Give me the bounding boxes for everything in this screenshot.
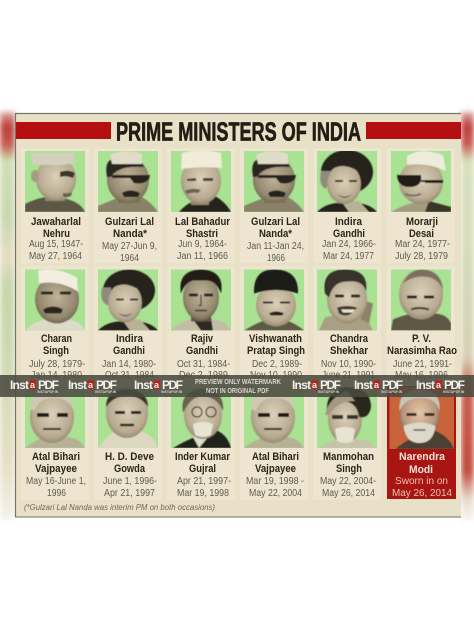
portrait: Vajpayee <box>25 387 85 448</box>
name: Narendra <box>399 451 446 463</box>
dates <box>247 241 304 264</box>
name <box>399 451 446 476</box>
dates <box>29 359 85 381</box>
name: Gulzari Lal <box>105 216 154 228</box>
dates: May 22, 2004 <box>249 488 302 499</box>
dates: 1996 <box>47 488 66 499</box>
name <box>330 333 369 357</box>
dates <box>392 476 452 499</box>
dates <box>102 359 156 381</box>
portrait: Modi <box>390 387 454 449</box>
card: Charan Singh <box>25 270 85 379</box>
dates: Mar 24, 1977 <box>323 251 374 262</box>
card: Atal Bihari Vajpayee <box>25 392 86 496</box>
name: Pratap Singh <box>247 345 305 357</box>
name <box>105 216 154 240</box>
dates: Apr 21, 1997- <box>177 476 231 487</box>
watermark logo 6: a <box>436 380 442 390</box>
dates: Oct 31, 1984- <box>177 359 230 370</box>
heading: title with red bars: PRIME MINISTERS OF INDIA <box>116 116 361 146</box>
name: Nanda* <box>259 228 293 240</box>
name: Manmohan <box>323 451 374 463</box>
watermark logo 2: INSTAPDF.IN <box>95 390 117 394</box>
portrait: V. P. Singh <box>244 270 304 330</box>
card: Narendra Modi (highlighted) <box>387 386 456 499</box>
dates: May 26, 2014 <box>322 488 375 499</box>
portrait: Shastri <box>171 150 231 212</box>
dates: May 16, 1996 <box>395 370 448 381</box>
name: Modi <box>409 464 433 476</box>
watermark logo 6: PDF <box>444 378 465 392</box>
watermark logo 6: INSTAPDF.IN <box>443 390 465 394</box>
name: Lal Bahadur <box>175 216 231 228</box>
name <box>175 451 231 475</box>
dates: Nov 10, 1990 <box>250 370 302 381</box>
name: Singh <box>336 463 362 475</box>
name: Vajpayee <box>255 463 296 475</box>
dates <box>26 476 86 499</box>
dates: May 16-June 1, <box>26 476 86 487</box>
dates: Sworn in on <box>395 476 448 487</box>
name: Singh <box>43 345 69 357</box>
watermark logo 6 <box>416 378 465 394</box>
name: Jawaharlal <box>31 216 81 228</box>
watermark notice: PREVIEW ONLY WATERMARK <box>195 379 281 386</box>
card: Inder Kumar Gujral <box>171 388 231 498</box>
dates <box>102 241 157 264</box>
watermark notice <box>195 379 281 395</box>
portrait: Nehru <box>25 151 85 212</box>
name: Nanda* <box>113 228 148 240</box>
dates <box>246 476 304 499</box>
dates: July 28, 1979 <box>395 251 448 262</box>
watermark logo 2: Inst <box>68 378 87 392</box>
dates: Jan 14, 1980 <box>31 370 82 381</box>
card: Vishwanath Pratap Singh <box>244 270 304 379</box>
dates: Oct 31, 1984 <box>105 370 154 381</box>
name <box>41 333 72 357</box>
card: Chandra Shekhar <box>317 270 377 379</box>
name <box>387 333 457 357</box>
portrait: Indira Gandhi <box>98 270 158 330</box>
watermark logo 3: INSTAPDF.IN <box>161 390 183 394</box>
card: Indira Gandhi <box>317 151 377 260</box>
name: Atal Bihari <box>252 451 299 463</box>
name: Narasimha Rao <box>387 345 457 357</box>
portrait: Nanda <box>244 151 304 212</box>
dates: 1964 <box>120 253 139 264</box>
name <box>247 333 305 357</box>
portrait: Morarji Desai <box>391 151 451 212</box>
card: Manmohan Singh <box>317 387 377 498</box>
name: Nehru <box>43 228 70 240</box>
watermark logo 3 <box>134 378 183 394</box>
watermark logo 1: INSTAPDF.IN <box>37 390 59 394</box>
dates: July 28, 1979- <box>29 359 85 370</box>
dates <box>250 359 302 381</box>
dates: May 27, 1964 <box>29 251 82 262</box>
watermark logo 1: a <box>30 380 36 390</box>
name: Chandra <box>330 333 369 345</box>
watermark band <box>0 375 474 397</box>
dates: Jan 11, 1966 <box>177 251 228 262</box>
card: Atal Bihari Vajpayee (second term) <box>244 392 304 498</box>
dates: Jan 14, 1980- <box>102 359 156 370</box>
watermark logo 5 <box>354 378 403 394</box>
dates: 1966 <box>267 253 285 264</box>
name: Inder Kumar <box>175 451 231 463</box>
portrait: Indira Gandhi <box>317 150 377 212</box>
card: P. V. Narasimha Rao <box>387 266 457 382</box>
card: Jawaharlal Nehru <box>25 151 85 261</box>
portrait: Vajpayee <box>244 387 304 448</box>
dates <box>177 359 230 381</box>
name: Shekhar <box>330 345 369 357</box>
portrait: Deve Gowda <box>98 387 158 448</box>
dates: May 26, 2014 <box>392 488 452 499</box>
dates: Dec 2, 1989 <box>179 370 228 381</box>
name: Gandhi <box>113 345 145 357</box>
dates: Mar 24, 1977- <box>395 239 450 250</box>
dates <box>177 476 231 499</box>
card: Lal Bahadur Shastri <box>171 151 231 260</box>
dates: June 1, 1996- <box>103 476 157 487</box>
portrait: Chandra Shekhar <box>317 270 377 330</box>
dates <box>103 476 157 499</box>
watermark logo 2: a <box>88 380 94 390</box>
dates: Mar 19, 1998 - <box>246 476 304 487</box>
watermark logo 1: PDF <box>38 378 59 392</box>
watermark logo 3: Inst <box>134 378 153 392</box>
dates <box>29 239 83 262</box>
dates: May 22, 2004- <box>320 476 376 487</box>
name: Gulzari Lal <box>251 216 300 228</box>
name <box>32 451 80 475</box>
footnote: (*Gulzari Lal Nanda was interim PM on both occasions) <box>24 503 215 512</box>
card: Rajiv Gandhi <box>171 270 231 379</box>
portrait: Gujral <box>171 387 231 448</box>
card: Gulzari Lal Nanda (second term) <box>244 151 304 261</box>
dates <box>321 359 376 381</box>
name: Gandhi <box>186 345 218 357</box>
name: Atal Bihari <box>32 451 80 463</box>
watermark logo 6: Inst <box>416 378 435 392</box>
watermark logo 1 <box>10 378 59 394</box>
portrait: Narasimha Rao <box>391 270 451 330</box>
watermark logo 5: PDF <box>382 378 403 392</box>
name <box>333 216 365 240</box>
watermark logo 4: Inst <box>292 378 311 392</box>
name: Gowda <box>114 463 146 475</box>
dates: Mar 19, 1998 <box>177 488 229 499</box>
name: Indira <box>335 216 363 228</box>
watermark logo 2 <box>68 378 117 394</box>
watermark logo 5: a <box>374 380 380 390</box>
dates: Aug 15, 1947- <box>29 239 83 250</box>
name: P. V. <box>412 333 431 345</box>
watermark logo 4: PDF <box>320 378 341 392</box>
dates: Nov 10, 1990- <box>321 359 376 370</box>
dates: Apr 21, 1997 <box>104 488 155 499</box>
name <box>175 216 231 240</box>
dates <box>395 239 450 262</box>
name: Desai <box>409 228 434 240</box>
name: Vishwanath <box>249 333 302 345</box>
name: Gujral <box>189 463 216 475</box>
dates <box>177 239 228 262</box>
card: Indira Gandhi (second term) <box>98 270 158 379</box>
dates: Dec 2, 1989- <box>252 359 302 370</box>
watermark logo 5: INSTAPDF.IN <box>381 390 403 394</box>
dates <box>322 239 376 262</box>
watermark logo 4: INSTAPDF.IN <box>318 390 340 394</box>
card: Morarji Desai <box>391 151 451 261</box>
name: Indira <box>116 333 144 345</box>
name <box>186 333 218 357</box>
panel: poster background <box>15 113 461 517</box>
name: Charan <box>41 333 72 345</box>
name <box>252 451 299 475</box>
dates: Jun 9, 1964- <box>178 239 227 250</box>
name <box>406 216 438 240</box>
name: Vajpayee <box>35 463 77 475</box>
dates: May 27-Jun 9, <box>102 241 157 252</box>
dates: Jan 24, 1966- <box>322 239 376 250</box>
name <box>113 333 145 357</box>
watermark logo 2: PDF <box>96 378 117 392</box>
watermark logo 1: Inst <box>10 378 29 392</box>
name <box>323 451 374 475</box>
dates: Jan 11-Jan 24, <box>247 241 304 252</box>
watermark logo 4: a <box>312 380 318 390</box>
name <box>105 451 154 475</box>
dates: June 21, 1991- <box>393 359 452 370</box>
name: H. D. Deve <box>105 451 154 463</box>
dates <box>393 359 452 381</box>
name: Shastri <box>186 228 218 240</box>
portrait: Charan Singh <box>25 269 85 330</box>
watermark logo 3: PDF <box>162 378 183 392</box>
name: Morarji <box>406 216 438 228</box>
name: Rajiv <box>191 333 214 345</box>
watermark logo 5: Inst <box>354 378 373 392</box>
dates <box>320 476 376 499</box>
watermark logo 4 <box>292 378 341 394</box>
portrait: Nanda <box>98 151 158 212</box>
name <box>31 216 81 240</box>
card: Gulzari Lal Nanda <box>98 151 158 261</box>
name <box>251 216 300 240</box>
portrait: Rajiv Gandhi <box>171 270 231 330</box>
name: Gandhi <box>333 228 365 240</box>
dates: June 21, 1991 <box>322 370 375 381</box>
watermark logo 3: a <box>154 380 160 390</box>
watermark notice: NOT IN ORIGINAL PDF <box>206 388 270 395</box>
card: H. D. Deve Gowda <box>98 387 158 498</box>
portrait: Manmohan Singh <box>317 387 377 448</box>
